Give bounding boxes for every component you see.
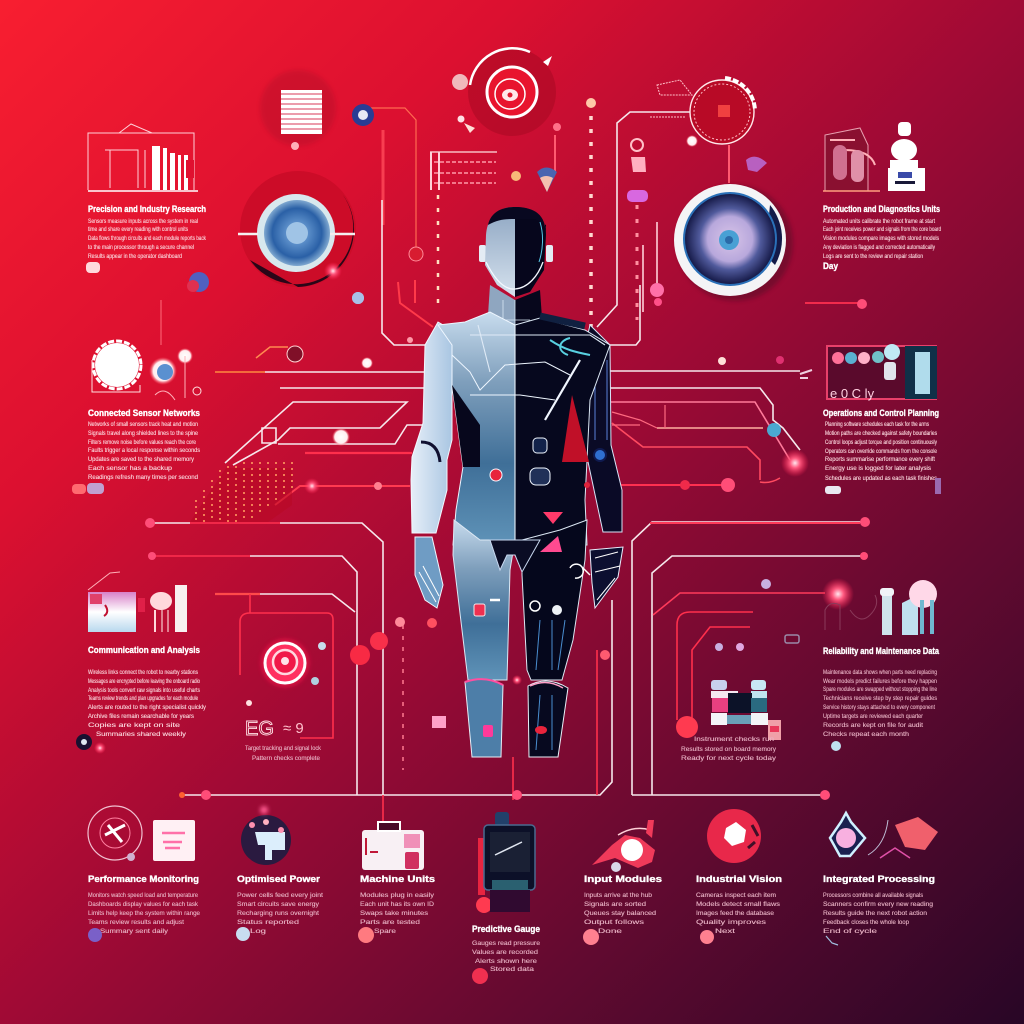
icon: top-right flask and robot [823, 122, 925, 191]
right arm [575, 325, 623, 608]
text block: bottom column 3: Swaps take minutes [360, 910, 429, 917]
text block: middle right: Energy use is logged for later analysis [825, 465, 932, 472]
text block: lower right: Wear models predict failures before they happen [823, 678, 937, 685]
text block: bottom column 4: Output follows [584, 919, 645, 926]
icon: top-left barcode badge [260, 70, 374, 150]
icon: centre-left target panel: ≈ 9 [283, 720, 304, 737]
text block: bottom column 4: Inputs arrive at the hub [584, 892, 652, 899]
text block: middle left: Networks of small sensors track heat and motion [88, 421, 198, 428]
text block: top left: time and share every reading with control units [88, 226, 189, 233]
icon: top-right gear target [650, 78, 755, 144]
circuit lines [150, 103, 865, 825]
text block: bottom column 4: Input Modules [584, 874, 662, 884]
text block: lower left: Archive files remain searchable for years [88, 713, 195, 720]
text block: bottom column 2: Log [250, 928, 267, 935]
centre-left panel frame [240, 613, 333, 738]
text block: bottom column 6: Scanners confirm every new reading [823, 901, 933, 908]
icon: bottom centre gauge device [476, 812, 535, 913]
icon: right middle control panel [827, 344, 937, 401]
icon: centre-right instrument [711, 680, 781, 740]
text block: bottom centre: Values are recorded [472, 949, 538, 956]
text block: middle right: Planning software schedules each task for the arms [825, 421, 930, 428]
text block: centre right small: Ready for next cycle today [681, 755, 777, 762]
icon: right lower beacon and towers [822, 578, 937, 635]
text block: bottom column 2: Recharging runs overnight [237, 910, 319, 917]
text block: lower right: Records are kept on file for audit [823, 722, 923, 729]
text block: bottom column 2 [237, 874, 323, 935]
text block: top right: Day [823, 261, 838, 271]
text block: centre left small: Target tracking and signal lock [245, 745, 322, 752]
text block: top right [823, 204, 941, 271]
centre-right panel frame [677, 612, 753, 720]
text block: bottom column 5 [696, 874, 782, 935]
pelvis [490, 540, 540, 572]
icon: bottom splash node [592, 820, 655, 872]
text block: lower left: Wireless links connect the robot to nearby stations [88, 669, 199, 676]
text block: lower left: Teams review trends and plan upgrades for each module [88, 695, 198, 702]
text block: lower left [88, 645, 207, 738]
text block: top left: Precision and Industry Research [88, 204, 206, 214]
text block: middle left: Filters remove noise before values reach the core [88, 439, 196, 446]
text block: bottom column 2: Power cells feed every joint [237, 892, 323, 899]
text block: lower right: Maintenance data shows when parts need replacing [823, 669, 937, 676]
icon: bottom orb and note card [88, 806, 195, 861]
text block: bottom column 4: Signals are sorted [584, 901, 646, 908]
text block: top left: to the main processor through a secure channel [88, 244, 194, 251]
text block: middle right: Motion paths are checked against safety boundaries [825, 430, 938, 437]
text block: bottom column 3 [360, 874, 435, 935]
text block: middle left: Signals travel along shielded lines to the spine [88, 430, 198, 437]
text block: bottom column 6: Processors combine all available signals [823, 892, 924, 899]
text block: middle left [88, 408, 201, 481]
text block: bottom column 6: Integrated Processing [823, 874, 935, 884]
head [479, 207, 553, 297]
right leg [522, 512, 590, 757]
text block: centre right small: Instrument checks run [694, 736, 774, 743]
text block: middle left: Readings refresh many times per second [88, 474, 198, 481]
text block: top left: Results appear in the operator dashboard [88, 253, 182, 260]
icon: left lower machines [88, 572, 187, 632]
text block: top left: Data flows through circuits and each module reports back [88, 235, 207, 242]
icon: bottom red gem circle [707, 809, 761, 863]
text block: centre left small: Pattern checks complete [252, 755, 320, 762]
text block: bottom column 4: Done [598, 928, 623, 935]
text block: bottom column 1: Monitors watch speed load and temperature [88, 892, 198, 899]
text block: bottom column 1: Performance Monitoring [88, 874, 199, 884]
icon: left middle lamps [92, 300, 201, 400]
text block: lower right: Service history stays attached to every component [823, 704, 935, 711]
icon: top centre ring sensor [452, 48, 561, 136]
icon: centre-left target panel [245, 639, 326, 740]
text block: middle right [823, 408, 939, 482]
bullet icons [72, 478, 941, 984]
text block: bottom column 6: Results guide the next robot action [823, 910, 927, 917]
icon: bottom white machine [362, 822, 424, 870]
text block: lower left: Messages are encrypted before leaving the onboard radio [88, 678, 200, 685]
dot matrix field [190, 462, 292, 522]
text block: top left [88, 204, 207, 260]
text block: lower right: Uptime targets are reviewed each quarter [823, 713, 924, 720]
text block: bottom column 2: Optimised Power [237, 874, 321, 884]
text block: middle left: Updates are saved to the shared memory [88, 456, 195, 463]
text block: lower right [823, 646, 940, 738]
text block: bottom column 5: Cameras inspect each item [696, 892, 776, 899]
text block: bottom column 4 [584, 874, 662, 935]
text block: bottom column 1: Limits help keep the system within range [88, 910, 200, 917]
text block: bottom column 6: Feedback closes the whole loop [823, 919, 909, 926]
left leg [453, 520, 515, 757]
text block: bottom column 1: Summary sent daily [100, 928, 169, 935]
text block: middle left: Connected Sensor Networks [88, 408, 200, 418]
text block: centre right small [681, 736, 777, 762]
text block: top right: Each joint receives power and signals from the core board [823, 226, 941, 233]
text block: middle right: Operations and Control Planning [823, 408, 939, 418]
text block: bottom column 5: Quality improves [696, 919, 767, 926]
text block: bottom column 2: Smart circuits save energy [237, 901, 320, 908]
text block: bottom centre [472, 924, 540, 973]
text block: bottom column 5: Next [715, 928, 735, 935]
icon: top-left building and bars [88, 124, 198, 191]
text block: lower left: Copies are kept on site [88, 722, 181, 729]
text block: bottom centre: Stored data [490, 966, 535, 973]
text block: centre right small: Results stored on board memory [681, 746, 777, 753]
text block: lower left: Analysis tools convert raw signals into useful charts [88, 687, 201, 694]
text block: top right: Production and Diagnostics Units [823, 204, 940, 214]
text block: middle left: Each sensor has a backup [88, 465, 172, 472]
text block: bottom column 1 [88, 874, 200, 935]
text block: bottom column 3: Machine Units [360, 874, 435, 884]
text block: top left: Sensors measure inputs across the system in real [88, 218, 198, 225]
neck [488, 285, 542, 328]
text block: bottom column 1: Dashboards display values for each task [88, 901, 199, 908]
icon: bottom glowing bulb [241, 806, 291, 865]
text block: middle right: Reports summarise performance every shift [825, 456, 935, 463]
robot figure [411, 207, 623, 757]
text block: top right: Any deviation is flagged and corrected automatically [823, 244, 936, 251]
icon: right middle control panel: e 0 C ly [830, 386, 875, 401]
text block: bottom column 3: Modules plug in easily [360, 892, 435, 899]
text block: bottom column 3: Each unit has its own ID [360, 901, 434, 908]
text block: middle right: Schedules are updated as each task finishes [825, 475, 938, 482]
text block: bottom column 5: Images feed the database [696, 910, 774, 917]
text block: centre left small [245, 745, 322, 762]
text block: top right: Logs are sent to the review and repair station [823, 253, 923, 260]
text block: lower left: Communication and Analysis [88, 645, 200, 655]
text block: bottom column 4: Queues stay balanced [584, 910, 656, 917]
text block: middle left: Faults trigger a local response within seconds [88, 447, 201, 454]
text block: bottom column 1: Teams review results and adjust [88, 919, 184, 926]
text block: bottom column 3: Spare [374, 928, 396, 935]
icon: left camera lens [238, 171, 356, 287]
text block: bottom column 6 [823, 874, 935, 935]
connector nodes [86, 98, 870, 800]
icon: centre-left target panel: EG [245, 718, 274, 740]
text block: top right: Automated units calibrate the robot frame at start [823, 218, 935, 225]
text block: lower right: Checks repeat each month [823, 731, 909, 738]
text block: bottom column 2: Status reported [237, 919, 300, 926]
text block: lower right: Spare modules are swapped without stopping the line [823, 686, 937, 693]
text block: bottom column 5: Models detect small flaws [696, 901, 781, 908]
left arm [411, 322, 452, 608]
text block: lower right: Technicians receive step by step repair guides [823, 695, 938, 702]
text block: bottom centre: Predictive Gauge [472, 924, 540, 934]
text block: bottom centre: Alerts shown here [475, 958, 537, 965]
text block: lower left: Alerts are routed to the right specialist quickly [88, 704, 207, 711]
text block: middle right: Control loops adjust torque and position continuously [825, 439, 938, 446]
text block: top right: Vision modules compare images with stored models [823, 235, 940, 242]
text block: bottom column 3: Parts are tested [360, 919, 420, 926]
text block: lower left: Summaries shared weekly [96, 731, 187, 738]
text block: bottom centre: Gauges read pressure [472, 940, 540, 947]
text block: lower right: Reliability and Maintenance Data [823, 646, 940, 656]
torso [438, 312, 610, 545]
icon: right camera lens [674, 184, 793, 301]
text block: bottom column 6: End of cycle [823, 928, 878, 935]
icon: bottom scanner and diamond [830, 813, 938, 858]
text block: bottom column 5: Industrial Vision [696, 874, 782, 884]
text block: middle right: Operators can override commands from the console [825, 448, 937, 455]
